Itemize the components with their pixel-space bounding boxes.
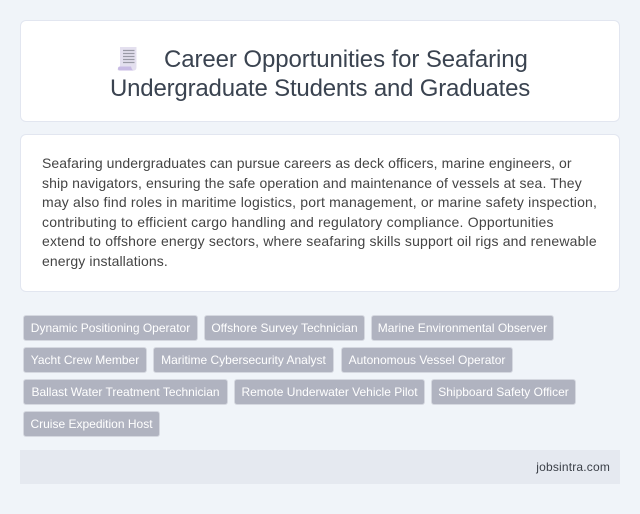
tag — [23, 347, 147, 373]
tag: Remote Underwater Vehicle Pilot — [241, 385, 418, 399]
title: Undergraduate Students and Graduates — [110, 75, 530, 102]
tag: Offshore Survey Technician — [211, 321, 358, 335]
tag — [23, 379, 228, 405]
tag: Maritime Cybersecurity Analyst — [161, 353, 326, 367]
text block: description: extend to offshore energy sectors, where seafaring skills support oil rigs and renewable — [42, 233, 597, 249]
tag: Marine Environmental Observer — [378, 321, 547, 335]
text block: description: ship navigators, ensuring the safe operation and maintenance of vessels at sea. They — [42, 175, 582, 191]
tag: Dynamic Positioning Operator — [31, 321, 190, 335]
footer bar — [20, 450, 620, 484]
tag — [371, 315, 554, 341]
tag — [431, 379, 576, 405]
panel: description card — [20, 134, 620, 292]
tag: Autonomous Vessel Operator — [349, 353, 505, 367]
title — [110, 46, 530, 102]
icon: document scroll — [118, 47, 136, 70]
title: Career Opportunities for Seafaring — [164, 46, 528, 73]
tag — [23, 411, 160, 437]
tag — [153, 347, 334, 373]
text block: description: Seafaring undergraduates can pursue careers as deck officers, marine engineers, or — [42, 155, 572, 171]
tag — [204, 315, 365, 341]
tag: Shipboard Safety Officer — [438, 385, 569, 399]
text block: description: may also find roles in maritime logistics, port management, or marine safety inspection, — [42, 194, 597, 210]
tag — [341, 347, 513, 373]
tag: Cruise Expedition Host — [30, 417, 153, 431]
tag: Yacht Crew Member — [31, 353, 139, 367]
text block: description: contributing to efficient cargo handling and regulatory compliance. Opportunities — [42, 214, 554, 230]
tag: Ballast Water Treatment Technician — [31, 385, 220, 399]
footer source text: jobsintra.com — [536, 460, 610, 474]
tag list: career roles — [23, 315, 576, 437]
text block: description: energy installations. — [42, 253, 168, 269]
tag — [234, 379, 425, 405]
tag — [23, 315, 198, 341]
text block: description — [42, 155, 597, 269]
panel: title card — [20, 20, 620, 122]
